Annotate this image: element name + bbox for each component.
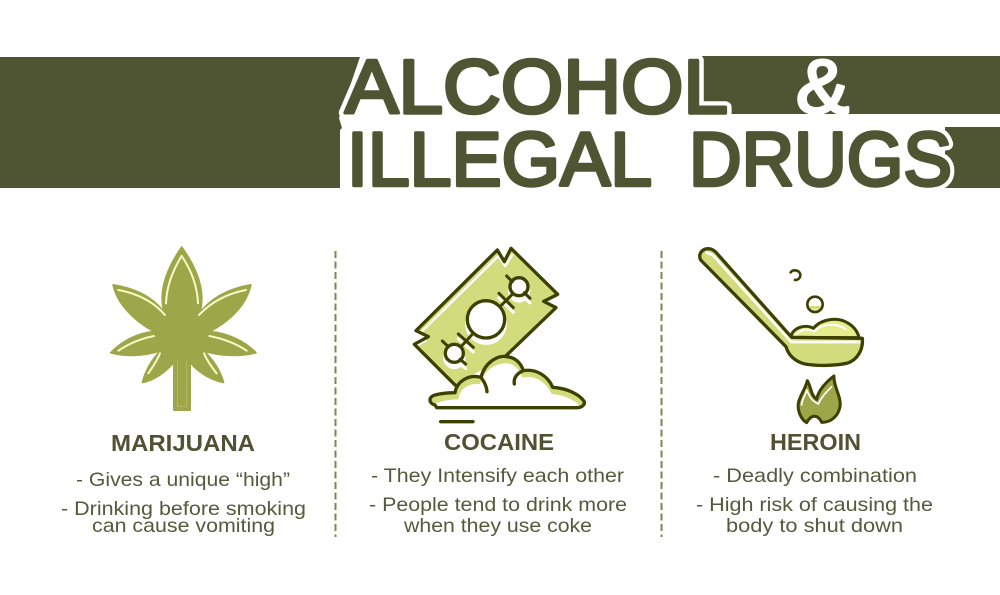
title: ILLEGAL <box>347 118 652 202</box>
text block: - Drinking before smoking <box>61 498 306 520</box>
title banner <box>0 56 1000 188</box>
column divider right <box>660 251 662 537</box>
title: ALCOHOL <box>345 45 728 130</box>
title: & <box>796 45 849 130</box>
dash under cloud <box>441 417 473 427</box>
icon: marijuana leaf <box>111 247 256 410</box>
heading: HEROIN <box>770 429 861 455</box>
spoon <box>700 249 862 365</box>
powder <box>791 319 859 338</box>
title: DRUGS <box>689 118 952 202</box>
text block: - Gives a unique “high” <box>76 469 290 491</box>
text block: body to shut down <box>726 515 903 537</box>
powder cloud <box>425 356 584 408</box>
icon: cocaine banknote and powder cloud <box>414 248 584 422</box>
heading: MARIJUANA <box>111 430 255 456</box>
column: heroin <box>696 429 933 537</box>
title: DRUGS <box>689 118 952 202</box>
text block: - People tend to drink more <box>369 494 627 516</box>
heading: COCAINE <box>444 429 554 455</box>
title: ILLEGAL <box>347 118 652 202</box>
column: marijuana <box>61 430 306 537</box>
text block: - High risk of causing the <box>696 494 933 516</box>
flame <box>798 376 840 423</box>
title: ALCOHOL <box>345 45 728 130</box>
column: cocaine <box>369 429 627 537</box>
rising drops <box>791 270 823 312</box>
title <box>345 45 952 202</box>
column divider left <box>334 251 336 537</box>
text block: can cause vomiting <box>92 515 275 537</box>
text block: - They Intensify each other <box>371 465 625 487</box>
icon: heroin spoon and flame <box>700 249 862 423</box>
text block <box>61 469 306 537</box>
text block: when they use coke <box>403 515 592 537</box>
text block: - Deadly combination <box>713 465 917 487</box>
text block <box>369 465 627 537</box>
text block <box>696 465 933 537</box>
banknote <box>414 248 558 385</box>
